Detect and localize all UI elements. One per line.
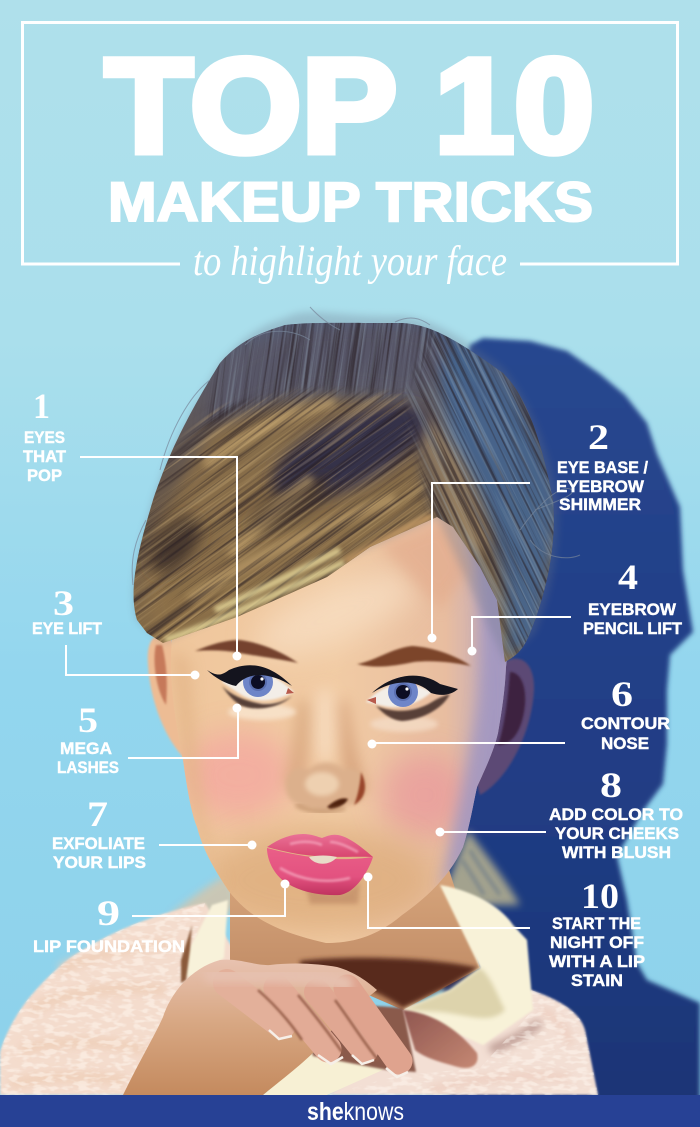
- lavender right edge: [440, 540, 512, 890]
- callout 2: eye base / eyebrow shimmer: SHIMMER: [559, 495, 641, 514]
- left eyebrow: [195, 640, 298, 663]
- right eyebrow: [357, 646, 471, 667]
- callout 1: eyes that pop: POP: [27, 466, 62, 485]
- thumb: [403, 1010, 478, 1068]
- callout 8: add color to your cheeks with blush: WITH BLUSH: [562, 843, 671, 862]
- nose: [286, 762, 365, 812]
- neck: [230, 860, 480, 1010]
- blush left: [182, 731, 294, 819]
- callout 1: eyes that pop: EYES: [24, 428, 65, 447]
- footer bar: [0, 1095, 700, 1127]
- flyaway strands: [132, 307, 580, 585]
- callout 10: start the night off with a lip stain: STAIN: [571, 971, 623, 990]
- callout 10: start the night off with a lip stain: [364, 872, 645, 990]
- subtitle: to highlight your face: [193, 239, 507, 285]
- streak texture on top: [208, 322, 435, 418]
- callout 1: eyes that pop: 1: [33, 386, 50, 426]
- yellow edge highlights: [165, 550, 345, 640]
- callout 4: eyebrow pencil lift: EYEBROW: [588, 600, 677, 619]
- sweater knit texture: [0, 900, 600, 1095]
- palm and wrist: [123, 960, 377, 1095]
- callout 2: eye base / eyebrow shimmer: EYE BASE /: [557, 458, 648, 477]
- finger 2: [277, 988, 328, 1049]
- sweater right: [327, 990, 598, 1095]
- callout 5: mega lashes: 5: [78, 700, 98, 740]
- right tan strand: [411, 406, 494, 557]
- callout 10: start the night off with a lip stain: WITH A LIP: [549, 952, 645, 971]
- left ear: [148, 635, 195, 760]
- streak texture on sweep: [134, 388, 431, 642]
- callout 5: mega lashes: [57, 700, 242, 777]
- callout 10: start the night off with a lip stain: 10: [581, 876, 619, 916]
- callout 3: eye lift: EYE LIFT: [32, 619, 103, 638]
- callout 8: add color to your cheeks with blush: ADD COLOR TO: [549, 805, 683, 824]
- tan highlights: [190, 402, 395, 600]
- fuzzy hair halo: [134, 312, 558, 662]
- callout 9: lip foundation: [33, 880, 290, 956]
- hand: [123, 960, 478, 1095]
- callout 6: contour nose: CONTOUR: [581, 714, 670, 733]
- chin and mouth warmth: [205, 828, 435, 932]
- title line: top 10: TOP 10: [105, 32, 594, 181]
- hair mass: [134, 323, 554, 662]
- navy wall shadow behind the model: [420, 338, 700, 1100]
- wisps of hair at left neck: [170, 872, 238, 925]
- shadow beneath fingers: [300, 1000, 416, 1072]
- callout 3: eye lift: [32, 583, 200, 680]
- callout 7: exfoliate your lips: YOUR LIPS: [53, 853, 146, 872]
- callout 3: eye lift: 3: [53, 583, 74, 623]
- callout 10: start the night off with a lip stain: NIGHT OFF: [550, 933, 644, 952]
- callout 1: eyes that pop: [23, 386, 242, 660]
- back of hand highlight: [212, 975, 345, 984]
- callout 10: start the night off with a lip stain: START THE: [552, 914, 641, 933]
- finger 3: [317, 992, 365, 1051]
- left eye: [207, 665, 294, 708]
- nose bridge highlight: [312, 689, 338, 760]
- finger 4: [347, 988, 399, 1061]
- face: [165, 500, 512, 943]
- callout 5: mega lashes: MEGA: [60, 739, 112, 758]
- lips: [267, 834, 373, 904]
- right eye: [366, 676, 458, 721]
- under-eye glow: [228, 704, 296, 720]
- sweater left: [0, 903, 240, 1095]
- callout 7: exfoliate your lips: EXFOLIATE: [52, 834, 145, 853]
- main title frame: [22, 22, 678, 264]
- collar: [181, 885, 533, 1095]
- finger 1: [227, 983, 282, 1025]
- title: [105, 32, 594, 233]
- callout 1: eyes that pop: THAT: [23, 447, 67, 466]
- hair: [131, 306, 580, 662]
- callout 8: add color to your cheeks with blush: [436, 765, 683, 862]
- neck shadow: [300, 958, 479, 1008]
- forehead highlight: [255, 568, 414, 662]
- gray-brown top band: [216, 332, 451, 370]
- callout 8: add color to your cheeks with blush: 8: [600, 765, 622, 805]
- callout 6: contour nose: 6: [611, 674, 633, 714]
- blue right side: [430, 320, 560, 660]
- ponytail: [440, 830, 520, 905]
- callout 4: eyebrow pencil lift: 4: [618, 557, 638, 597]
- callout 6: contour nose: NOSE: [601, 734, 649, 753]
- finger separators: [258, 990, 378, 1060]
- callout 2: eye base / eyebrow shimmer: 2: [588, 417, 609, 457]
- callout 8: add color to your cheeks with blush: YOUR CHEEKS: [555, 824, 679, 843]
- forehead warm tone near hair: [386, 526, 467, 602]
- sweep brown: [146, 400, 430, 640]
- blush right: [381, 753, 469, 837]
- nails: [269, 1030, 408, 1077]
- title line: makeup tricks: MAKEUP TRICKS: [108, 170, 593, 233]
- callout 9: lip foundation: LIP FOUNDATION: [33, 937, 185, 956]
- callout 6: contour nose: [368, 674, 670, 753]
- streak texture on right side: [406, 330, 554, 662]
- nose sides: [284, 700, 310, 792]
- callout 4: eyebrow pencil lift: [468, 557, 683, 656]
- callout 2: eye base / eyebrow shimmer: [428, 417, 648, 642]
- callout 5: mega lashes: LASHES: [57, 758, 119, 777]
- callout 2: eye base / eyebrow shimmer: EYEBROW: [556, 477, 645, 496]
- right ear: [470, 659, 534, 795]
- callout 7: exfoliate your lips: 7: [87, 794, 108, 834]
- callout 7: exfoliate your lips: [52, 794, 256, 872]
- callout 9: lip foundation: 9: [97, 893, 120, 933]
- dark swirl: [265, 398, 434, 506]
- callout 4: eyebrow pencil lift: PENCIL LIFT: [583, 619, 683, 638]
- left face edge tone: [172, 656, 207, 850]
- sheknows logo: sheknows: [307, 1098, 404, 1126]
